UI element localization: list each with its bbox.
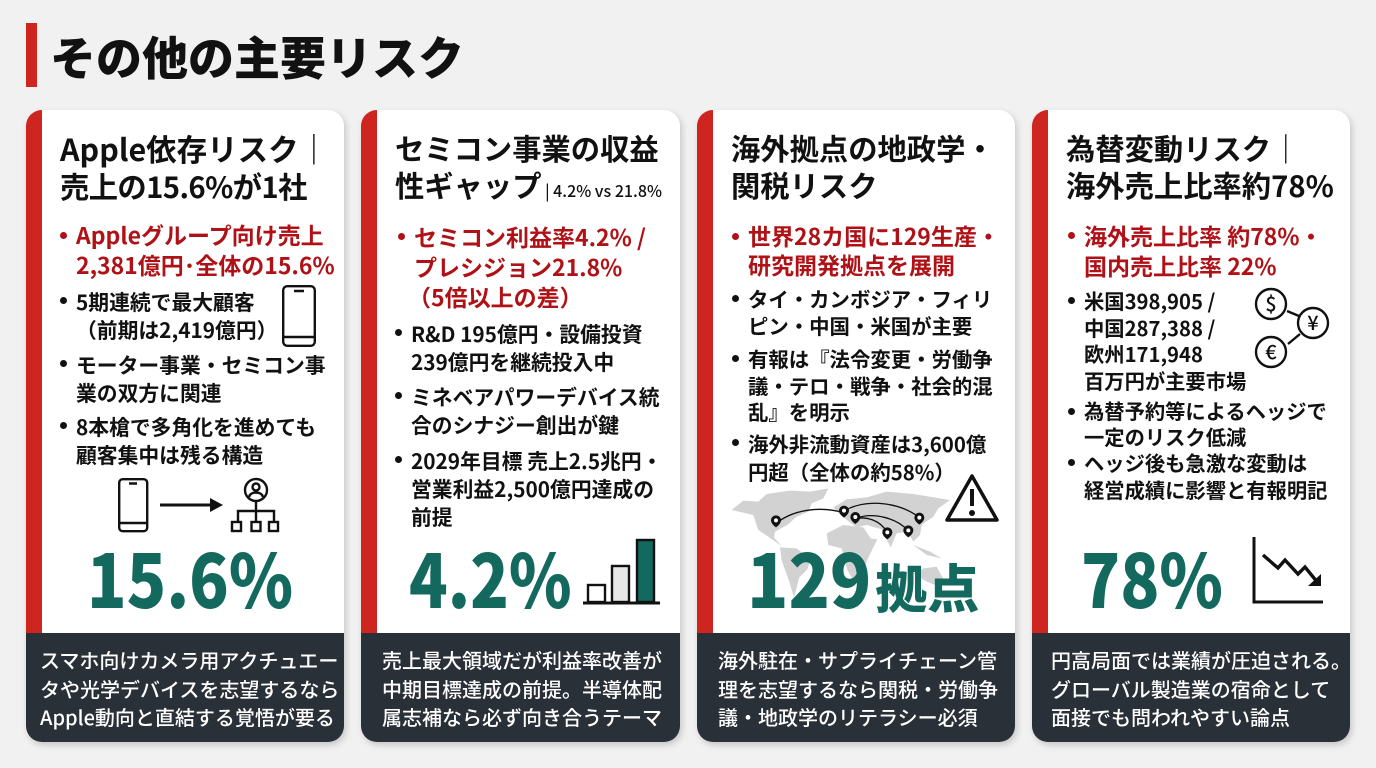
big number: 129 <box>747 523 871 630</box>
footer note: グローバル製造業の宿命として <box>1051 674 1330 702</box>
bullet: 合のシナジー創出が鍵 <box>411 409 619 439</box>
bullet <box>411 319 643 375</box>
bullet: 乱』を明示 <box>748 396 850 426</box>
icon: bar chart <box>583 538 660 604</box>
panel: 海外拠点の地政学・関税リスク <box>697 110 1015 742</box>
panel: 為替変動リスク <box>1032 110 1350 742</box>
bullet: 5期連続で最大顧客 <box>76 286 255 316</box>
big number: 78% <box>1081 523 1223 630</box>
card heading <box>60 126 329 207</box>
icon: currency exchange: € <box>1265 336 1277 365</box>
key bullet: Appleグループ向け売上 <box>76 217 324 251</box>
bullet <box>76 350 326 406</box>
card heading <box>1066 127 1334 206</box>
card heading: 為替変動リスク｜ <box>1066 127 1300 169</box>
bullet: モーター事業・セミコン事 <box>76 349 326 379</box>
footer note: 中期目標達成の前提。半導体配 <box>382 674 662 702</box>
footer note <box>1032 633 1350 742</box>
big number: 15.6% <box>87 523 293 630</box>
key bullet: 2,381億円･全体の15.6% <box>76 246 335 280</box>
card heading: 関税リスク <box>731 164 877 206</box>
footer note: 属志補なら必ず向き合うテーマ <box>382 702 662 731</box>
bullet: 欧州171,948 <box>1084 338 1203 368</box>
bullet: 為替予約等によるヘッジで <box>1084 395 1327 425</box>
big number: 拠点 <box>875 548 979 623</box>
key bullet <box>748 221 1000 278</box>
bullet: ピン・中国・米国が主要 <box>748 310 972 340</box>
key bullet: （5倍以上の差） <box>408 279 583 313</box>
icon: warning triangle <box>945 474 999 522</box>
key bullet: 世界28カ国に129生産・ <box>748 218 1000 252</box>
bullet <box>748 429 986 485</box>
bullet: 2029年目標 売上2.5兆円・ <box>411 445 662 475</box>
footer note <box>697 633 1015 742</box>
bullet: 有報は『法令変更・労働争 <box>748 343 993 373</box>
bullet: 顧客集中は残る構造 <box>76 439 263 469</box>
key bullet <box>414 221 646 311</box>
key bullet: 海外売上比率 約78%・ <box>1084 218 1323 252</box>
bullet <box>748 285 992 339</box>
bullet: タイ・カンボジア・フィリ <box>748 283 992 313</box>
bullet: R&D 195億円・設備投資 <box>411 318 643 348</box>
bullet: 米国398,905 / <box>1084 285 1215 315</box>
big number: 4.2% <box>409 523 572 630</box>
footer note <box>361 633 680 742</box>
footer note: 理を志望するなら関税・労働争 <box>718 674 998 702</box>
bullet <box>411 446 662 530</box>
bullet <box>1084 449 1327 503</box>
bullet: ヘッジ後も急激な変動は <box>1084 447 1307 477</box>
footer note: 円高局面では業績が圧迫される。 <box>1051 645 1350 674</box>
bullet: 8本槍で多角化を進めても <box>76 411 316 441</box>
bullet: 営業利益2,500億円達成の <box>411 473 654 503</box>
footer note: 海外駐在・サプライチェーン管 <box>718 645 997 674</box>
panel: Apple依存リスク <box>26 110 344 742</box>
title: その他の主要リスク <box>50 23 464 89</box>
card heading: 海外売上比率約78% <box>1066 164 1334 206</box>
bullet: 海外非流動資産は3,600億 <box>748 428 986 458</box>
bullet: 業の双方に関連 <box>76 377 222 407</box>
bullet: ミネベアパワーデバイス統 <box>411 381 660 411</box>
bullet <box>1084 287 1246 394</box>
bullet: （前期は2,419億円） <box>76 314 277 344</box>
footer note: 議・地政学のリテラシー必須 <box>718 702 978 731</box>
icon: declining chart <box>1252 537 1323 604</box>
card heading: セミコン事業の収益 <box>395 127 659 169</box>
icon: smartphone <box>282 285 316 347</box>
footer note: 売上最大領域だが利益率改善が <box>382 645 662 674</box>
card heading: 売上の15.6%が1社 <box>60 165 307 207</box>
bullet: 中国287,388 / <box>1084 312 1215 342</box>
icon: currency exchange <box>1254 288 1330 368</box>
bullet <box>76 412 316 468</box>
key bullet: 国内売上比率 22% <box>1084 248 1277 282</box>
bullet <box>411 382 660 438</box>
card heading <box>395 127 662 206</box>
card heading: 海外拠点の地政学・ <box>731 127 995 169</box>
bullet: 議・テロ・戦争・社会的混 <box>748 370 993 400</box>
bullet <box>1084 398 1327 449</box>
card heading <box>731 127 995 206</box>
map: world with routes <box>732 488 950 597</box>
icon: smartphone to customer arrow <box>118 478 280 532</box>
footer note: 面接でも問われやすい論点 <box>1051 702 1290 731</box>
red stripe <box>361 110 377 633</box>
icon: currency exchange: $ <box>1265 288 1277 317</box>
bullet: 百万円が主要市場 <box>1084 365 1246 395</box>
red stripe <box>26 110 42 633</box>
bullet: 経営成績に影響と有報明記 <box>1084 474 1327 504</box>
big number <box>747 523 979 630</box>
key bullet <box>1084 220 1323 280</box>
card heading: 性ギャップ | 4.2% vs 21.8% <box>395 164 662 206</box>
bullet: 239億円を継続投入中 <box>411 346 614 376</box>
footer note: タや光学デバイスを志望するなら <box>40 674 339 702</box>
bullet: 一定のリスク低減 <box>1084 420 1246 450</box>
footer note: スマホ向けカメラ用アクチュエー <box>40 645 338 674</box>
bullet: 円超（全体の約58%） <box>748 456 955 486</box>
card heading: Apple依存リスク｜ <box>60 126 329 170</box>
key bullet <box>76 220 335 279</box>
red stripe <box>1032 110 1048 633</box>
panel: セミコン事業の収益性ギャップ <box>361 110 680 742</box>
bullet: 前提 <box>411 501 453 531</box>
footer note <box>26 633 344 742</box>
bullet <box>748 345 993 424</box>
icon: currency exchange: ¥ <box>1307 307 1319 336</box>
key bullet: プレシジョン21.8% <box>414 249 622 283</box>
key bullet: 研究開発拠点を展開 <box>748 246 955 280</box>
red stripe <box>697 110 713 633</box>
key bullet: セミコン利益率4.2% / <box>414 219 646 253</box>
title accent bar <box>26 23 37 87</box>
bullet <box>76 287 277 343</box>
footer note: Apple動向と直結する覚悟が要る <box>40 702 335 731</box>
